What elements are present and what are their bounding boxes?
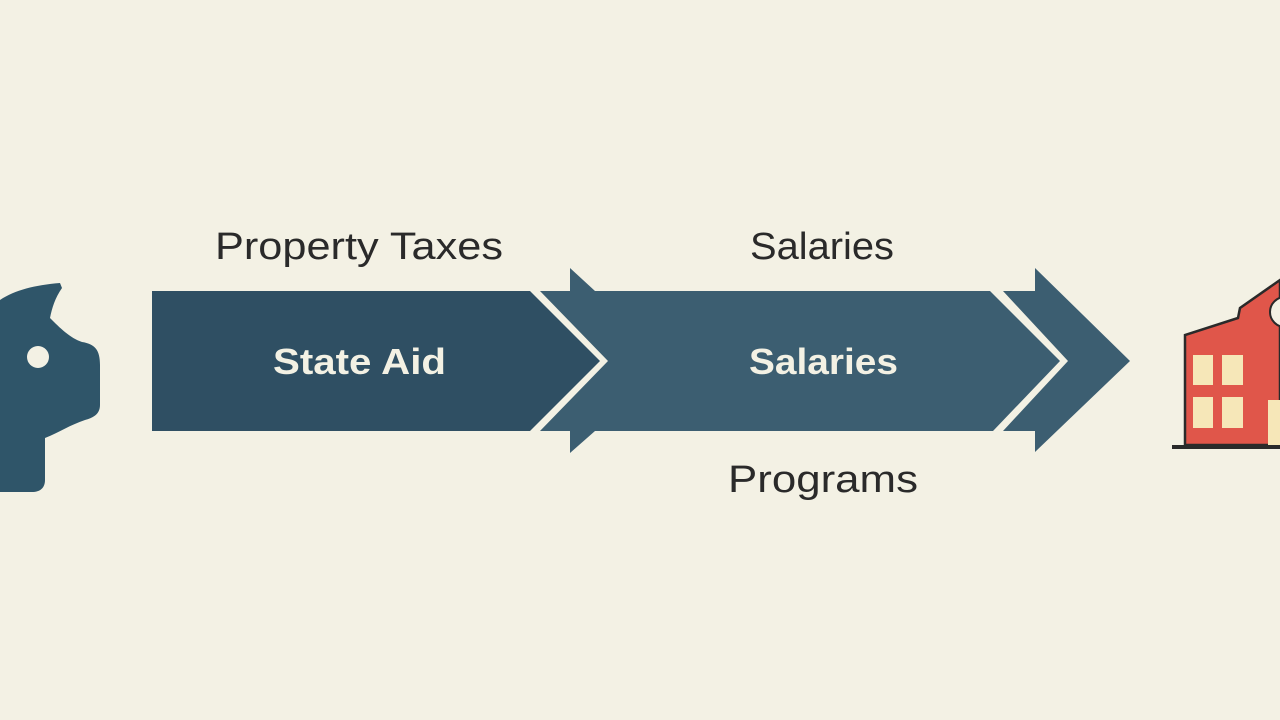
icon: school building [1172, 280, 1280, 449]
arrow: state aid: State Aid [273, 341, 446, 382]
arrow: state aid [152, 291, 600, 431]
label: programs: Programs [728, 459, 918, 501]
icon: piggy bank [0, 283, 100, 492]
arrow: salaries [540, 268, 1060, 453]
label: salaries top: Salaries [750, 226, 894, 268]
arrow: final chevron [1003, 268, 1130, 452]
arrow: salaries: Salaries [749, 341, 898, 382]
label: property taxes: Property Taxes [215, 226, 503, 268]
